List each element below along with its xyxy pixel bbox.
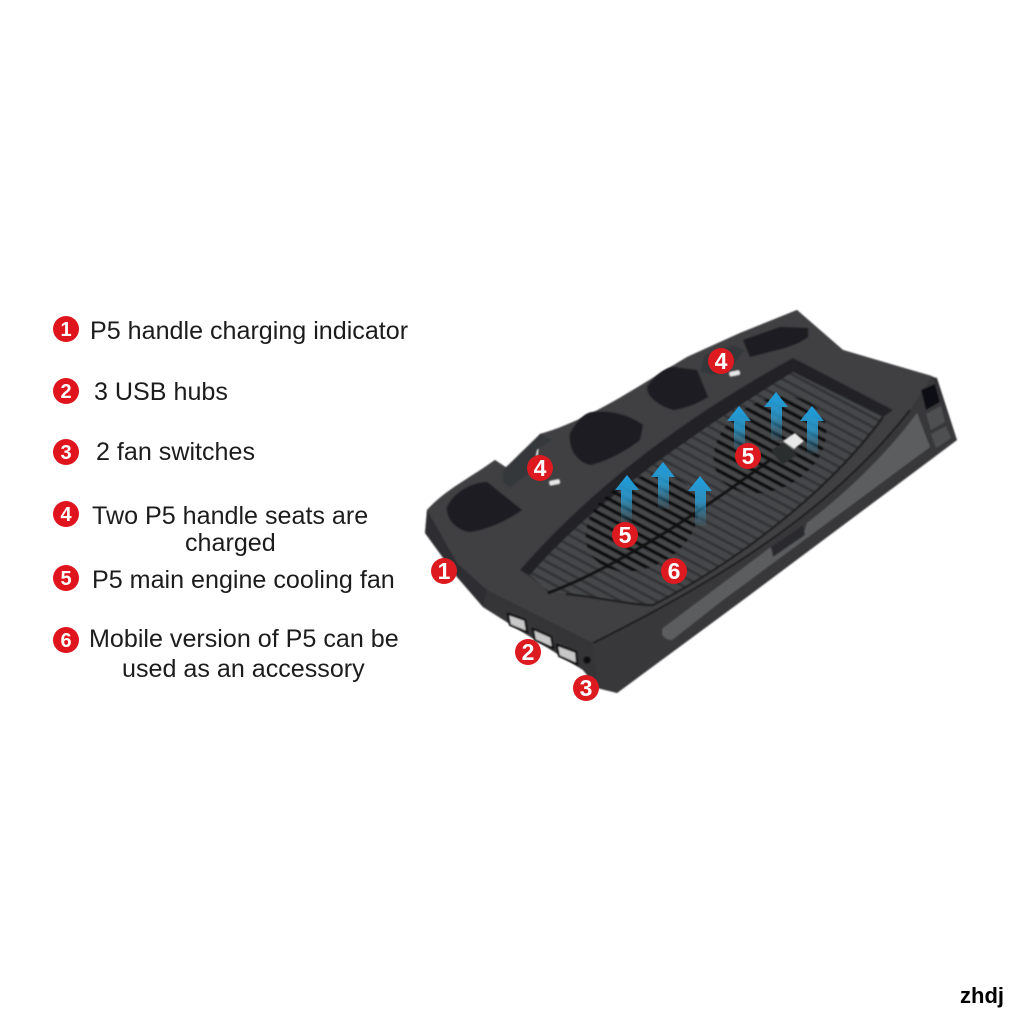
airflow arrow group <box>615 392 824 526</box>
callout 2: 2 <box>522 639 534 665</box>
callout 3: 3 <box>580 675 592 701</box>
feature 3: 2 fan switches <box>96 438 255 466</box>
feature 6: Mobile version of P5 can be <box>89 625 399 653</box>
USB ports <box>508 614 590 664</box>
callout 5 right: 5 <box>742 443 755 469</box>
callout 4 right <box>708 348 734 374</box>
stand body <box>425 310 957 693</box>
airflow arrow <box>727 406 751 450</box>
feature 6 <box>53 625 399 683</box>
callout 6: 6 <box>668 558 680 584</box>
numbered callouts <box>431 348 761 701</box>
feature 4 <box>53 501 368 557</box>
callout 4 left: 4 <box>534 455 547 481</box>
airflow arrow <box>651 462 675 509</box>
callout 5 left: 5 <box>619 522 632 548</box>
airflow arrow <box>800 406 824 454</box>
feature 6: 6 <box>60 630 72 652</box>
feature 6: used as an accessory <box>122 655 365 683</box>
feature 4: charged <box>185 529 276 557</box>
callout 4 right: 4 <box>715 348 728 374</box>
feature 1: P5 handle charging indicator <box>90 317 408 345</box>
callout 2 <box>515 639 541 665</box>
fan tray with vents <box>520 358 893 605</box>
callout 4 left <box>527 455 553 481</box>
callout 1: 1 <box>438 558 451 584</box>
cooling stand product illustration <box>425 310 957 701</box>
callout 5 left <box>612 522 638 548</box>
airflow arrow <box>688 476 712 526</box>
callout 3 <box>573 675 599 701</box>
callout 1 <box>431 558 457 584</box>
airflow arrow <box>615 475 639 522</box>
cable and USB plug <box>548 433 804 593</box>
feature 4: 4 <box>60 504 72 526</box>
callout 5 right <box>735 443 761 469</box>
feature 4: Two P5 handle seats are <box>92 502 368 530</box>
feature 2: 3 USB hubs <box>94 378 228 406</box>
feature 5: 5 <box>60 568 72 590</box>
feature 2: 2 <box>60 381 72 403</box>
airflow arrow <box>764 392 788 440</box>
feature 1: 1 <box>60 319 72 341</box>
feature 3: 3 <box>60 442 72 464</box>
feature 5: P5 main engine cooling fan <box>92 566 395 594</box>
callout 6 <box>661 558 687 584</box>
watermark: zhdj <box>960 983 1004 1008</box>
feature list <box>53 316 408 683</box>
controller charging seats <box>447 327 808 532</box>
